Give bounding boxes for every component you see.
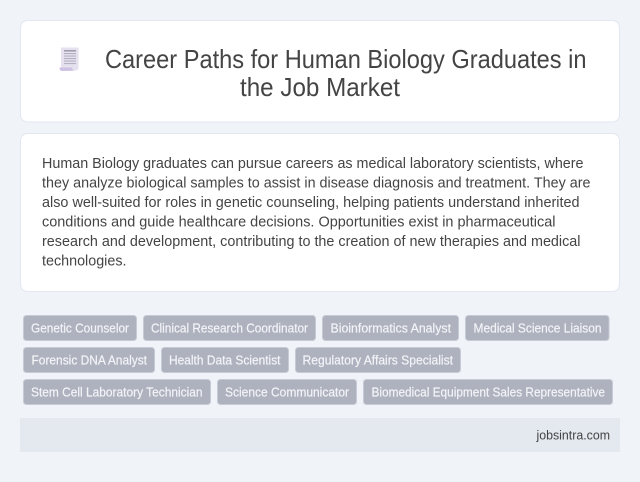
panel: title card: [20, 20, 620, 122]
tag: Medical Science Liaison: [466, 316, 609, 340]
tag: Medical Science Liaison: Medical Science Liaison: [474, 320, 602, 336]
text block: description: technologies.: [42, 252, 126, 270]
text block: description: research and development, contributing to the creation of new therapies and medical: [42, 233, 580, 250]
tag: Bioinformatics Analyst: Bioinformatics Analyst: [330, 320, 451, 336]
text block: description: also well-suited for roles in genetic counseling, helping patients understand inherited: [42, 194, 580, 211]
footer bar: [20, 418, 620, 452]
tag: Science Communicator: Science Communicator: [225, 384, 350, 400]
tag: Clinical Research Coordinator: Clinical Research Coordinator: [151, 320, 309, 336]
tag: Forensic DNA Analyst: Forensic DNA Analyst: [32, 352, 147, 368]
tag: Stem Cell Laboratory Technician: [24, 380, 210, 404]
tag: Clinical Research Coordinator: [144, 316, 316, 340]
panel: description: [20, 134, 620, 292]
tag: Regulatory Affairs Specialist: Regulatory Affairs Specialist: [302, 352, 453, 368]
tag: Stem Cell Laboratory Technician: Stem Cell Laboratory Technician: [31, 384, 202, 400]
title: Career Paths for Human Biology Graduates in: [105, 46, 586, 74]
text block: description: [42, 155, 590, 270]
tag: Genetic Counselor: Genetic Counselor: [31, 320, 130, 336]
tag: Health Data Scientist: [162, 348, 288, 372]
tag: Regulatory Affairs Specialist: [296, 348, 460, 372]
tag: Bioinformatics Analyst: [322, 316, 458, 340]
title: [105, 46, 586, 102]
tag list: [24, 316, 612, 404]
tag: Genetic Counselor: [24, 316, 136, 340]
text block: description: Human Biology graduates can pursue careers as medical laboratory scientists, where: [42, 155, 584, 172]
tag: Biomedical Equipment Sales Representative: [364, 380, 612, 404]
tag: Forensic DNA Analyst: [24, 348, 154, 372]
icon: paper scroll: [60, 48, 78, 71]
footer text: jobsintra.com: [536, 428, 610, 442]
title: the Job Market: [240, 74, 400, 102]
tag: Biomedical Equipment Sales Representative: Biomedical Equipment Sales Representative: [372, 384, 605, 400]
text block: description: conditions and guide healthcare decisions. Opportunities exist in pharmaceutical: [42, 214, 556, 230]
tag: Health Data Scientist: Health Data Scientist: [169, 352, 281, 368]
text block: description: they analyze biological samples to assist in disease diagnosis and treatment. They are: [42, 174, 590, 192]
tag: Science Communicator: [218, 380, 356, 404]
